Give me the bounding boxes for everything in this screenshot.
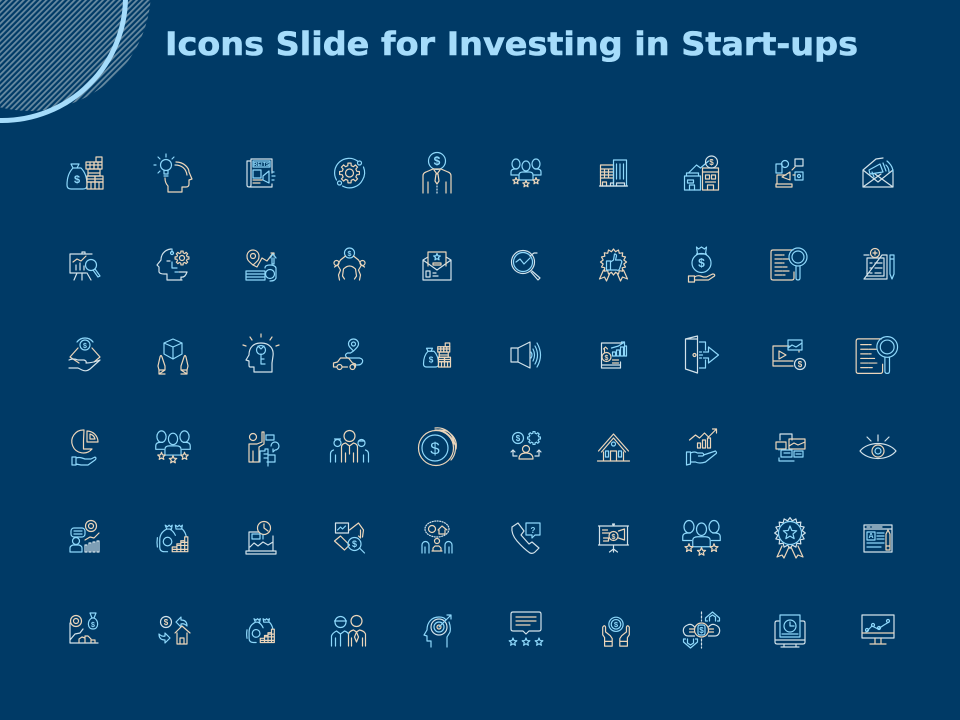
icon: investor in suit xyxy=(423,152,451,193)
icon: money gear person: $ xyxy=(516,434,521,443)
icon: property value xyxy=(684,156,718,190)
icon: money in hand: $ xyxy=(83,343,87,350)
icon: person and property xyxy=(249,432,279,466)
icon: car route xyxy=(334,339,363,370)
icon: money house exchange xyxy=(159,616,190,644)
icon: money bag and boxes xyxy=(67,157,103,189)
icon: team with stars 3 xyxy=(683,520,720,555)
icon: target and money chart xyxy=(70,613,98,643)
icon: bags and coins xyxy=(157,525,188,552)
icon: coin in hands: $ xyxy=(614,620,619,629)
icon: web article: A xyxy=(868,533,874,540)
icon: head with key xyxy=(243,334,279,372)
icon: bags and coins 2 xyxy=(247,619,274,642)
icon: web article xyxy=(864,525,892,552)
icon: report with chart xyxy=(602,342,626,368)
icon: cloud money flow xyxy=(683,612,720,648)
icon: team with stars xyxy=(511,159,541,187)
icon: dollar coin stack xyxy=(418,428,456,466)
icon: location growth coins xyxy=(246,250,276,281)
icon: video with money: $ xyxy=(798,360,803,369)
icon: report with chart: $ xyxy=(605,355,609,362)
icon: two professionals xyxy=(332,616,366,646)
icon: document search xyxy=(771,248,807,280)
icon: presentation screen: $ xyxy=(612,534,616,541)
icon: money bag and boxes: $ xyxy=(74,174,80,186)
icon: money bag and boxes small xyxy=(424,343,450,367)
icon: desktop with report xyxy=(775,615,805,647)
icon: reviews with stars xyxy=(509,612,543,645)
icon: group around coin: $ xyxy=(348,251,352,258)
icon: money gear person xyxy=(511,432,541,459)
icon: house xyxy=(598,434,630,461)
icon: cloud money flow: $ xyxy=(699,626,704,635)
icon: target and money chart: $ xyxy=(91,622,95,629)
icon: money bag on hand xyxy=(688,247,715,282)
icon: three professionals xyxy=(330,430,368,462)
icon: eye xyxy=(860,435,896,458)
icon: REITS newspaper xyxy=(247,159,275,187)
icon: clipboard with pen xyxy=(864,248,894,279)
icon: presentation board with magnifier xyxy=(70,252,100,280)
icon: mail with letter xyxy=(423,252,451,280)
icon: money bag on hand: $ xyxy=(698,256,705,270)
icon: monitor with line graph xyxy=(862,615,894,644)
title: Icons Slide for Investing in Start-ups xyxy=(165,25,858,63)
decorative ring xyxy=(0,0,126,120)
icon: money in hand xyxy=(69,338,100,371)
icon: social media marketing xyxy=(776,159,803,187)
icon: investor in suit: $ xyxy=(434,154,441,168)
icon: gear orbit xyxy=(335,158,365,188)
icon: pie chart on hand xyxy=(72,430,98,465)
icon: exit door xyxy=(686,336,718,373)
icon: phone with question: ? xyxy=(531,526,536,535)
icon: laptop analytics xyxy=(246,522,276,554)
icon: property value: $ xyxy=(709,158,714,167)
icon: financial analysis: $ xyxy=(352,539,357,549)
icon: money house exchange: $ xyxy=(164,618,169,627)
icon: REITS newspaper: REITS xyxy=(253,162,270,168)
icon: laptop and media xyxy=(776,434,805,461)
icon: team with stars 2 xyxy=(156,431,190,463)
icon: coin in hands xyxy=(603,617,629,646)
icon: money bag and boxes small: $ xyxy=(429,356,434,365)
icon: box between hands xyxy=(158,339,188,374)
icon: dollar coin stack: $ xyxy=(430,439,440,458)
icon: analysis magnifier xyxy=(512,250,540,280)
decorative hatched circle xyxy=(0,0,151,111)
icon: megaphone envelope xyxy=(863,158,893,187)
icon: idea head xyxy=(154,154,192,192)
icon: strategy person with chart xyxy=(70,520,99,552)
icon: speaker xyxy=(511,342,540,368)
icon: presentation screen xyxy=(598,524,628,552)
icon: video with money xyxy=(773,340,806,370)
icon: award rosette xyxy=(775,518,805,558)
icon: thumbs up badge xyxy=(600,249,628,281)
icon: meeting discussion xyxy=(422,521,452,553)
icon: financial analysis xyxy=(334,523,364,553)
icon: mind with gear xyxy=(157,249,189,280)
icon: growth on hand xyxy=(686,429,716,465)
icon: phone with question xyxy=(512,523,540,553)
icon: city buildings xyxy=(600,160,628,186)
icon: document search large xyxy=(856,337,898,373)
icon: target in head xyxy=(424,615,451,647)
icon: group around coin xyxy=(334,248,365,280)
